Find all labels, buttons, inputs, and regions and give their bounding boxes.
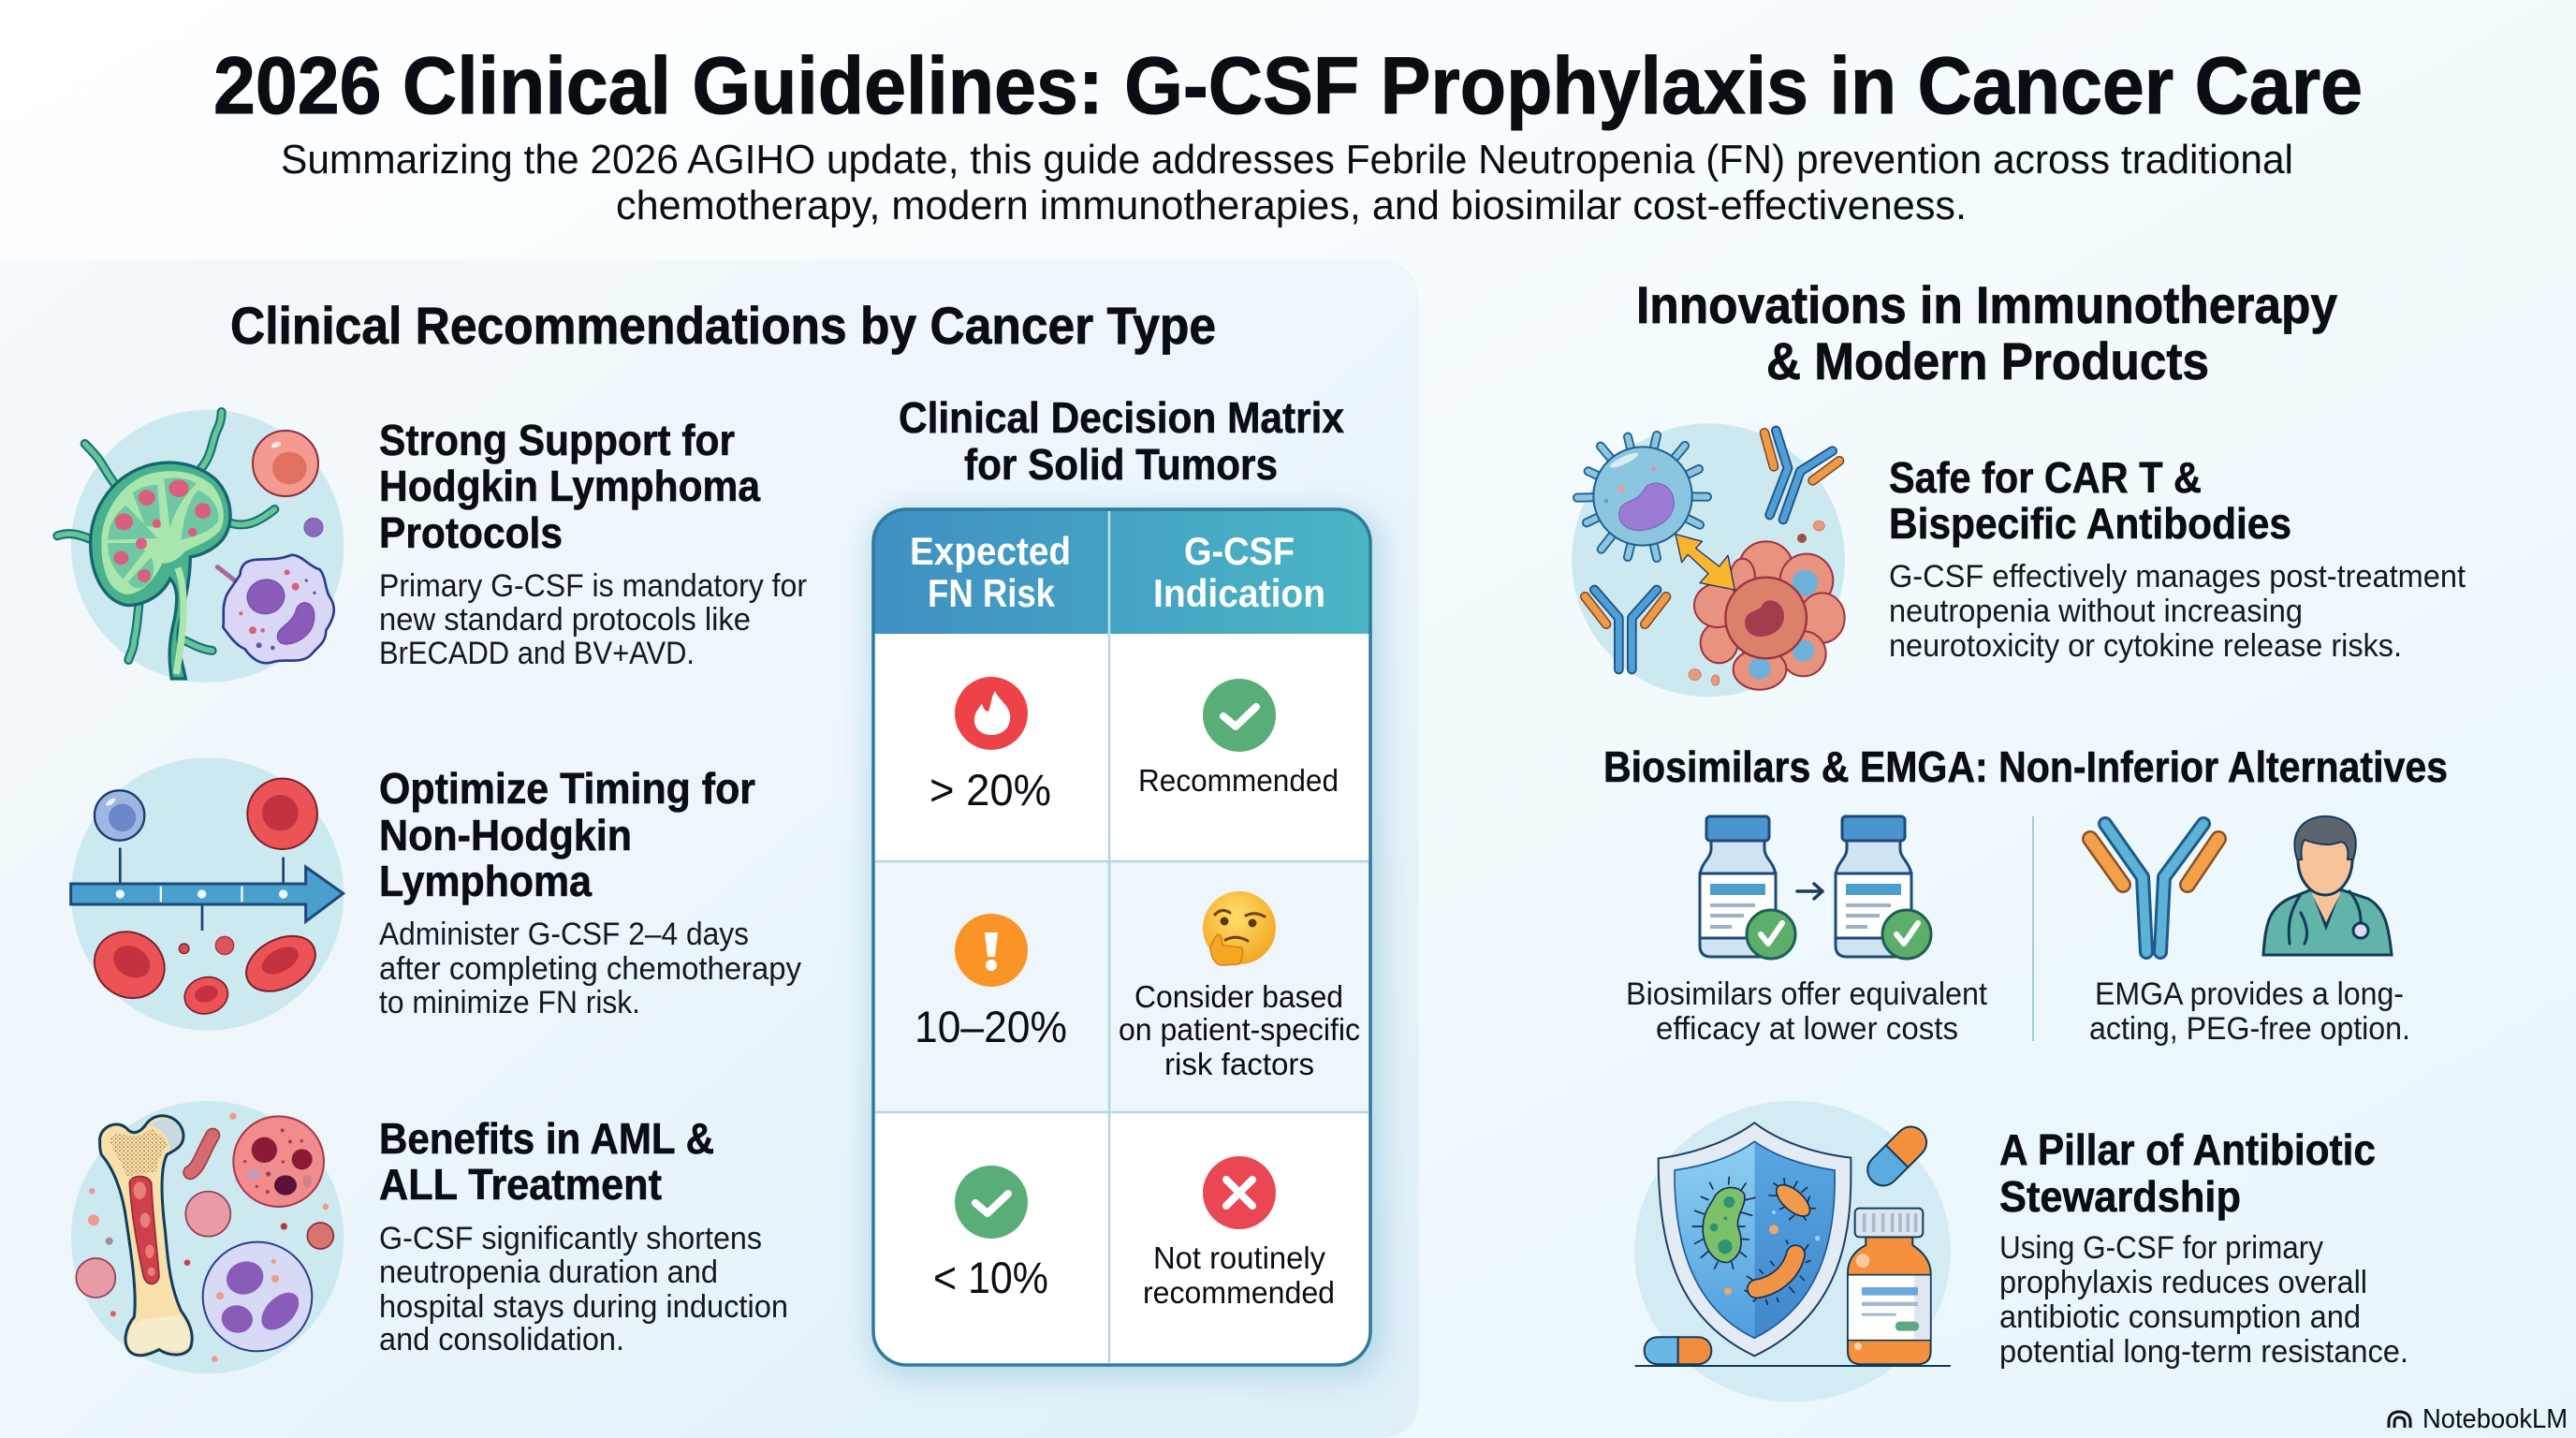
icon: EMGA antibody <box>2090 824 2218 952</box>
text: CAR T and bispecific antibodies <box>1889 453 2466 664</box>
label: consider: Consider based <box>1134 979 1343 1014</box>
text: Hodgkin lymphoma: BrECADD and BV+AVD. <box>379 636 695 671</box>
heading: decision matrix: for Solid Tumors <box>964 440 1278 489</box>
text: biosimilars caption <box>1626 976 1988 1047</box>
label: recommended: Recommended <box>1138 763 1339 798</box>
text: non-Hodgkin lymphoma <box>379 764 801 1020</box>
text: biosimilars caption: efficacy at lower costs <box>1656 1011 1958 1047</box>
text: Hodgkin lymphoma <box>379 416 807 671</box>
icon: biosimilar vials <box>1700 816 1931 959</box>
text: Hodgkin lymphoma: Primary G-CSF is mandatory for <box>379 568 807 604</box>
label: consider: on patient-specific <box>1119 1012 1360 1047</box>
icon: green check low risk <box>955 1166 1028 1239</box>
text: Hodgkin lymphoma: new standard protocols like <box>379 602 751 638</box>
text: non-Hodgkin lymphoma: Lymphoma <box>379 857 592 905</box>
icon: shield, bacteria and antibiotics <box>1634 1101 1951 1401</box>
value: above 20 percent: > 20% <box>929 765 1051 814</box>
label: not routinely recommended <box>1143 1240 1335 1310</box>
icon: orange warning <box>955 914 1028 987</box>
subtitle: Summarizing the 2026 AGIHO update, this guide addresses Febrile Neutropenia (FN) prevention across traditional <box>281 137 2293 183</box>
text: EMGA caption <box>2089 976 2410 1047</box>
text: antibiotic stewardship: A Pillar of Antibiotic <box>1999 1125 2376 1174</box>
heading: clinical recommendations: Clinical Recommendations by Cancer Type <box>230 296 1216 355</box>
text: Hodgkin lymphoma: Hodgkin Lymphoma <box>379 462 760 510</box>
text: AML and ALL <box>379 1114 788 1357</box>
table: clinical decision matrix <box>871 509 1382 1378</box>
table header: expected FN risk: FN Risk <box>928 571 1056 615</box>
text: CAR T and bispecific antibodies: G-CSF effectively manages post-treatment <box>1889 559 2466 594</box>
icon: red cross <box>1203 1156 1276 1229</box>
icon: green check <box>1203 679 1276 752</box>
icon: flame <box>955 677 1028 750</box>
text: non-Hodgkin lymphoma: after completing chemotherapy <box>379 951 801 987</box>
label: not routinely recommended: recommended <box>1143 1275 1335 1310</box>
arrow: vial to vial <box>1797 884 1822 899</box>
text: AML and ALL: and consolidation. <box>379 1322 624 1357</box>
heading: biosimilars and EMGA: Biosimilars & EMGA: Non-Inferior Alternatives <box>1603 742 2448 791</box>
heading: decision matrix <box>899 393 1344 489</box>
text: CAR T and bispecific antibodies: Bispecific Antibodies <box>1889 499 2291 548</box>
label: not routinely recommended: Not routinely <box>1153 1240 1325 1275</box>
icon: lymph node and cells <box>57 410 344 682</box>
text: antibiotic stewardship: Stewardship <box>1999 1172 2241 1221</box>
table header: G-CSF indication <box>1153 529 1325 615</box>
value: below 10 percent: < 10% <box>933 1253 1048 1302</box>
subtitle <box>281 137 2293 228</box>
panel: clinical recommendations <box>0 259 1419 1438</box>
text: CAR T and bispecific antibodies: neutropenia without increasing <box>1889 594 2303 629</box>
icon: vial two <box>1836 816 1931 959</box>
heading: innovations: Innovations in Immunotherapy <box>1636 275 2337 334</box>
table header: expected FN risk <box>910 529 1071 615</box>
text: Hodgkin lymphoma: Protocols <box>379 508 563 557</box>
heading: innovations <box>1636 275 2337 390</box>
text: CAR T and bispecific antibodies: Safe for CAR T & <box>1889 453 2202 502</box>
table header: G-CSF indication: Indication <box>1153 571 1325 615</box>
value: 10 to 20 percent: 10–20% <box>915 1002 1067 1051</box>
title: 2026 Clinical Guidelines: G-CSF Prophylaxis in Cancer Care <box>213 41 2363 131</box>
icon: doctor <box>2263 816 2392 955</box>
text: non-Hodgkin lymphoma: to minimize FN risk. <box>379 985 640 1020</box>
text: AML and ALL: Benefits in AML & <box>379 1114 714 1163</box>
icon: timeline with blood cells <box>71 757 344 1031</box>
NotebookLM badge: NotebookLM <box>2422 1404 2568 1434</box>
text: antibiotic stewardship: potential long-term resistance. <box>1999 1334 2408 1370</box>
text: CAR T and bispecific antibodies: neurotoxicity or cytokine release risks. <box>1889 628 2402 664</box>
text: antibiotic stewardship: prophylaxis reduces overall <box>1999 1265 2367 1300</box>
label: consider <box>1119 979 1360 1081</box>
label: consider: risk factors <box>1164 1047 1314 1081</box>
icon: T cell, tumor and antibodies <box>1572 423 1845 697</box>
text: Hodgkin lymphoma: Strong Support for <box>379 416 735 464</box>
text: antibiotic stewardship: antibiotic consumption and <box>1999 1299 2361 1335</box>
text: EMGA caption: acting, PEG-free option. <box>2089 1011 2410 1047</box>
text: AML and ALL: hospital stays during induction <box>379 1289 788 1325</box>
text: non-Hodgkin lymphoma: Administer G-CSF 2–4 days <box>379 917 749 952</box>
table header: expected FN risk: Expected <box>910 529 1071 573</box>
text: AML and ALL: G-CSF significantly shortens <box>379 1221 762 1256</box>
subtitle: chemotherapy, modern immunotherapies, and biosimilar cost-effectiveness. <box>616 183 1967 228</box>
table header: G-CSF indication: G-CSF <box>1184 529 1295 573</box>
text: AML and ALL: neutropenia duration and <box>379 1255 718 1290</box>
heading: decision matrix: Clinical Decision Matrix <box>899 393 1344 442</box>
text: biosimilars caption: Biosimilars offer equivalent <box>1626 976 1988 1012</box>
text: antibiotic stewardship <box>1999 1125 2408 1370</box>
icon: vial one <box>1700 816 1795 959</box>
icon: thinking face <box>1203 891 1276 965</box>
text: AML and ALL: ALL Treatment <box>379 1160 662 1209</box>
text: EMGA caption: EMGA provides a long- <box>2095 976 2404 1012</box>
text: antibiotic stewardship: Using G-CSF for primary <box>1999 1230 2323 1266</box>
text: non-Hodgkin lymphoma: Optimize Timing for <box>379 764 755 813</box>
icon: bone and marrow cells <box>71 1101 344 1373</box>
heading: innovations: & Modern Products <box>1766 331 2209 390</box>
text: non-Hodgkin lymphoma: Non-Hodgkin <box>379 811 632 859</box>
